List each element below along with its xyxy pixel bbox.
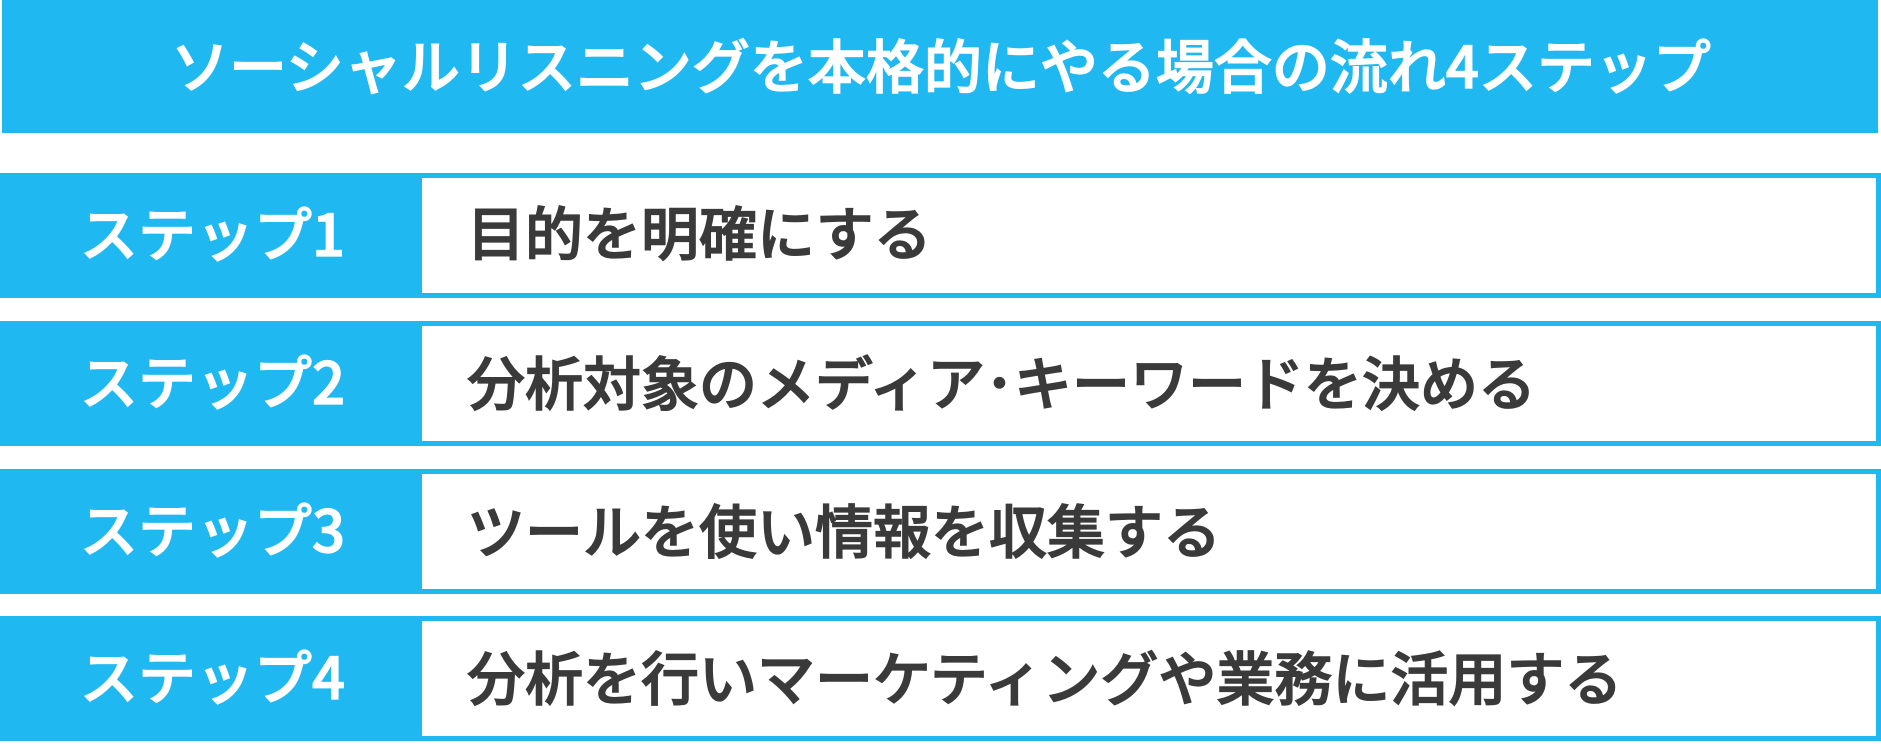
step 4 text: 分析を行いマーケティングや業務に活用する bbox=[467, 633, 1622, 717]
step 2 text: 分析対象のメディア･キーワードを決める bbox=[467, 338, 1536, 422]
step 4 label: ステップ4 bbox=[80, 632, 345, 716]
title banner bbox=[2, 0, 1878, 133]
step 1 label: ステップ1 bbox=[80, 189, 345, 273]
step 4 row bbox=[0, 616, 1881, 741]
step 1 content panel bbox=[422, 178, 1876, 293]
step 2 content panel bbox=[422, 326, 1876, 441]
step 2 row bbox=[0, 321, 1881, 446]
step 1 text: 目的を明確にする bbox=[467, 188, 932, 272]
step 3 row bbox=[0, 469, 1881, 594]
step 3 text: ツールを使い情報を収集する bbox=[467, 486, 1221, 570]
title text: ソーシャルリスニングを本格的にやる場合の流れ4ステップ bbox=[171, 21, 1711, 105]
step 2 label: ステップ2 bbox=[80, 337, 345, 421]
step 1 row bbox=[0, 173, 1881, 298]
step 3 content panel bbox=[422, 474, 1876, 589]
step 4 content panel bbox=[422, 621, 1876, 736]
step 3 label: ステップ3 bbox=[80, 485, 345, 569]
